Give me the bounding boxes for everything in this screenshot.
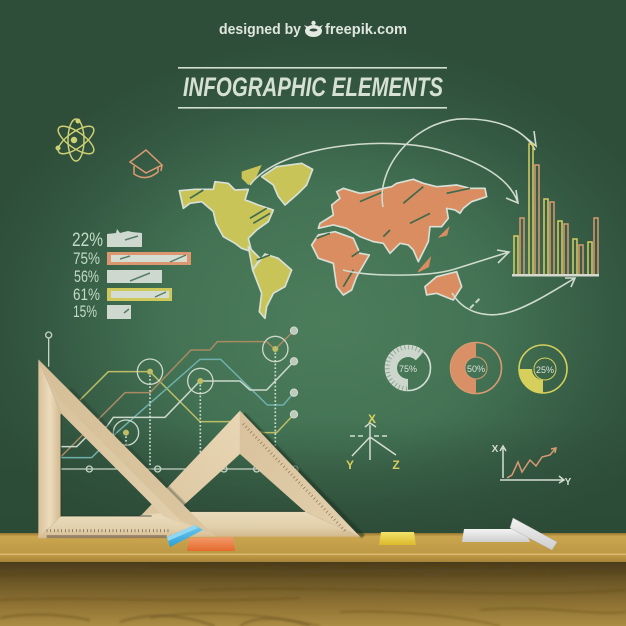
graph labels: X [492,444,499,455]
highlight circles [113,336,288,445]
chalk: white tilted [510,518,557,550]
bar chart [512,144,599,276]
arrows from map to chart [250,119,575,315]
bar: 56 percent [107,270,162,283]
chalk: white flat [462,529,530,542]
bar: 22 percent [107,229,142,247]
region: greenland [262,163,313,205]
right leg [240,411,360,537]
region: south america [248,247,292,318]
left leg [38,359,61,538]
icon: graduation cap [130,150,162,178]
hypotenuse [38,359,215,537]
percentage labels: 61% [73,285,100,304]
axis labels [346,412,400,472]
bottom [38,516,215,538]
icon: small growth graph [492,444,572,488]
region: north america [179,182,273,252]
header credit [219,21,407,38]
wooden ledge [0,533,626,562]
graph labels: Y [565,477,572,488]
base [123,512,360,537]
donut: 25 percent: 25% [536,365,554,375]
chalk: yellow [379,532,416,545]
region: arctic island [242,165,262,185]
donut: 75 percent: 75% [399,364,417,374]
percentage labels: 15% [73,302,97,321]
dotted drop lines [126,349,275,467]
graph labels [492,444,572,488]
percentage labels [72,230,103,321]
chalk: blue eraser [167,525,203,547]
donut: 75 percent [386,346,430,390]
icon: freepik mascot [304,21,323,37]
bar: 61 percent [107,288,172,301]
donut: 50 percent [450,342,502,394]
donut: 25 percent [519,345,567,393]
donut: 50 percent: 50% [467,364,485,374]
region: australia [425,272,462,300]
series lines [61,331,294,458]
left wooden set square [38,359,215,538]
axis labels: Z [392,458,400,472]
wooden lower panel [0,562,626,626]
line chart [46,327,298,472]
percentage labels: 56% [74,267,99,286]
icon: atom [54,119,98,161]
percentage labels: 75% [73,249,100,268]
header credit: freepik.com [325,22,407,38]
left leg [140,411,240,517]
bar list with percentages [72,229,191,321]
chalk: orange [187,537,235,551]
world map [179,163,487,318]
region: africa [312,232,369,295]
region: eurasia [318,179,487,262]
axes [46,332,298,472]
axis labels: Y [346,458,354,472]
header credit: designed by [219,22,301,38]
icon: xyz axes [346,412,400,472]
percentage labels: 22% [72,230,103,251]
bar: 15 percent [107,305,131,319]
bar: 75 percent [107,252,191,265]
end markers [290,327,298,418]
axis labels: X [368,412,376,426]
right wooden set square [123,411,363,537]
title: INFOGRAPHIC ELEMENTS [183,72,443,102]
